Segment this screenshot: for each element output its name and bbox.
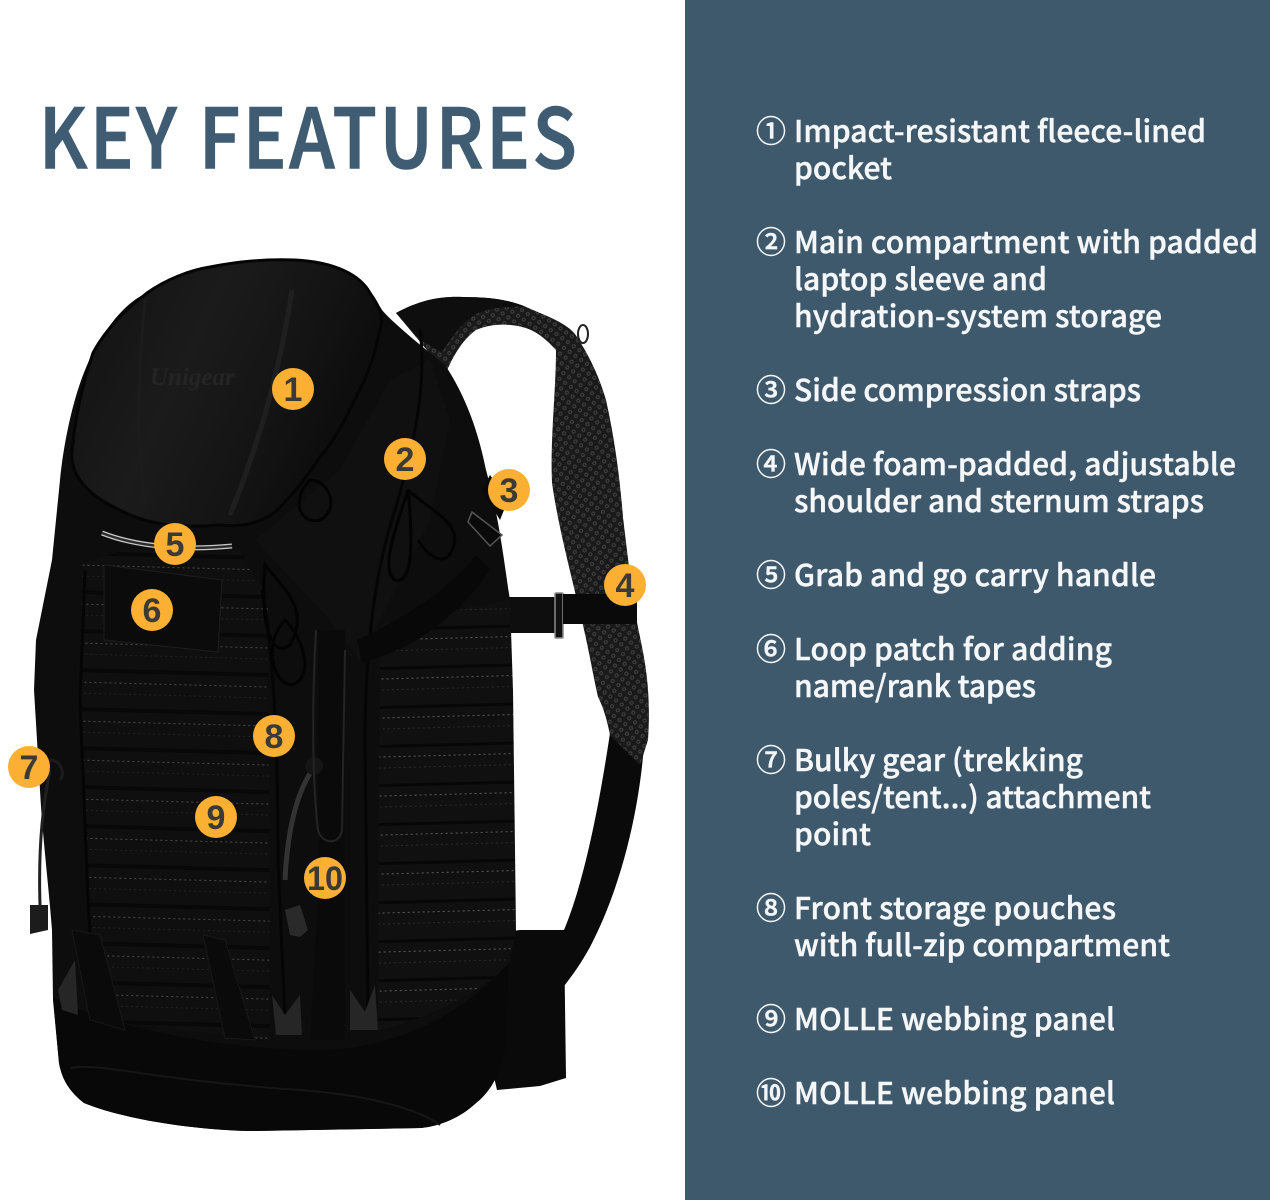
compression buckle [468, 475, 508, 546]
upper flap [255, 360, 450, 660]
feature 4: shoulder and sternum straps [794, 477, 1204, 521]
feature 7: ⑦ [756, 736, 786, 780]
feature 5: ⑤ [756, 551, 786, 595]
marker 9 [195, 796, 237, 838]
hard shell pocket [72, 260, 382, 526]
feature 10: ⑩ [756, 1069, 786, 1113]
lower shoulder strap [510, 733, 644, 1017]
marker 2 [384, 438, 426, 480]
zippers [80, 330, 422, 1020]
feature 10: MOLLE webbing panel [794, 1069, 1115, 1113]
feature 5: Grab and go carry handle [794, 551, 1156, 595]
feature 6: ⑥ [756, 625, 786, 669]
feature 6: Loop patch for adding [794, 625, 1112, 669]
feature 2: hydration-system storage [794, 292, 1162, 336]
feature 3: ③ [756, 366, 786, 410]
feature 7: point [794, 810, 871, 854]
feature 4: ④ [756, 440, 786, 484]
sternum strap [505, 593, 637, 638]
marker 4 [604, 564, 646, 606]
vertical webbing [310, 630, 345, 1040]
backpack illustration [30, 260, 649, 1131]
feature 1: ① [756, 107, 786, 151]
feature 1: Impact-resistant fleece-lined [794, 107, 1206, 151]
feature 7 [756, 736, 1151, 854]
marker 7 [8, 746, 50, 788]
marker 2: 2 [396, 441, 414, 479]
marker 5 [154, 523, 196, 565]
feature 1 [756, 107, 1206, 188]
waist pad [490, 930, 566, 1090]
right MOLLE panel [378, 600, 516, 1030]
main body [34, 262, 515, 1131]
feature 8: with full-zip compartment [794, 921, 1170, 965]
feature 1: pocket [794, 144, 892, 188]
logo embossed: Unigear [150, 364, 235, 391]
zipper pulls and cords [264, 480, 455, 685]
feature 8: ⑧ [756, 884, 786, 928]
feature 9: ⑨ [756, 995, 786, 1039]
feature 2 [756, 218, 1258, 336]
marker 9: 9 [207, 799, 225, 837]
marker 6: 6 [143, 592, 161, 630]
feature 4 [756, 440, 1236, 521]
bottom compression straps [72, 930, 255, 1040]
feature 6 [756, 625, 1112, 706]
marker 10: 10 [307, 860, 343, 898]
marker 1 [272, 368, 314, 410]
zipper end tabs [58, 960, 378, 1035]
marker 1: 1 [284, 371, 302, 409]
side cord and toggle [30, 760, 62, 934]
marker 6 [131, 589, 173, 631]
feature 3: Side compression straps [794, 366, 1141, 410]
bottom hem [53, 963, 509, 1131]
loop patch [104, 565, 222, 652]
feature 4: Wide foam-padded, adjustable [794, 440, 1236, 484]
padded shoulder strap [396, 297, 649, 765]
marker 7: 7 [20, 749, 38, 787]
marker 5: 5 [166, 526, 184, 564]
cord with toggle [285, 630, 345, 937]
feature 8: Front storage pouches [794, 884, 1116, 928]
feature 2: Main compartment with padded [794, 218, 1258, 262]
feature 9: MOLLE webbing panel [794, 995, 1115, 1039]
front MOLLE panel [80, 549, 270, 1040]
marker 8: 8 [265, 718, 283, 756]
number markers [8, 368, 646, 899]
feature 7: Bulky gear (trekking [794, 736, 1083, 780]
feature 8 [756, 884, 1170, 965]
D-ring [578, 325, 588, 343]
feature 6: name/rank tapes [794, 662, 1036, 706]
panel: feature list [685, 0, 1270, 1200]
diagonal chest strap [357, 555, 490, 662]
marker 8 [253, 715, 295, 757]
title: KEY FEATURES [39, 74, 577, 192]
feature 2: laptop sleeve and [794, 255, 1047, 299]
marker 3: 3 [500, 472, 518, 510]
marker 3 [488, 469, 530, 511]
feature 7: poles/tent...) attachment [794, 773, 1151, 817]
marker 4: 4 [616, 567, 635, 605]
carry handle [102, 533, 232, 548]
feature 2: ② [756, 218, 786, 262]
